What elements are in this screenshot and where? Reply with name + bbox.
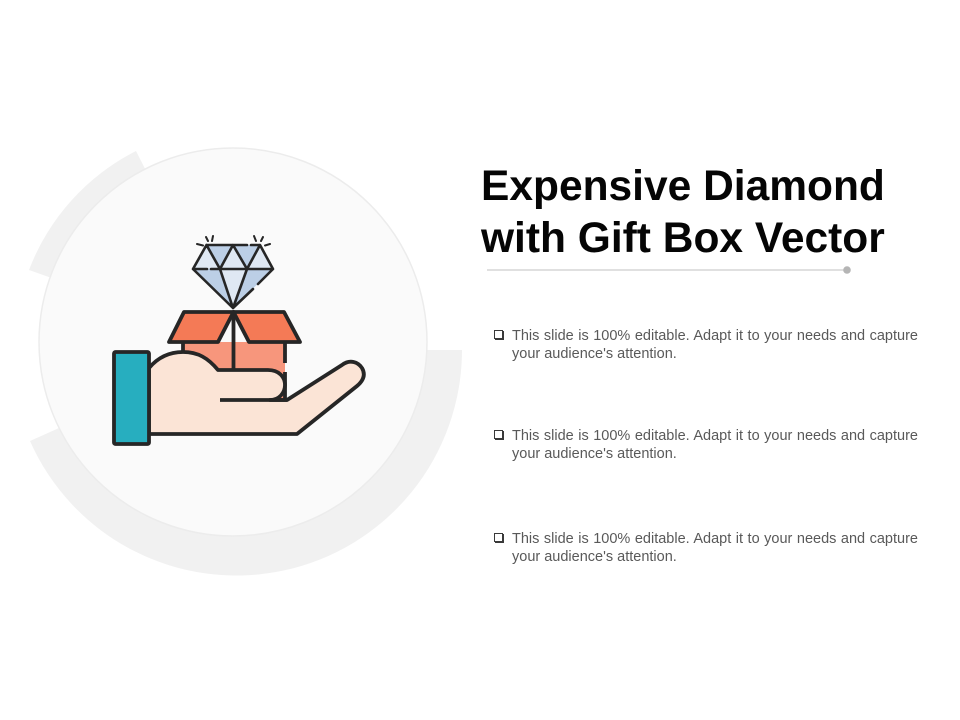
bullet 1: This slide is 100% editable. Adapt it to your needs and capture (512, 328, 918, 344)
bullet 3 (494, 531, 918, 565)
lower ring arc (30, 350, 462, 576)
bullet 3: This slide is 100% editable. Adapt it to your needs and capture (512, 531, 918, 547)
main circle (39, 148, 427, 536)
bullet 1: your audience's attention. (512, 346, 677, 362)
thumb line (220, 398, 287, 402)
upper-left ring arc (29, 151, 233, 342)
icon: gift box (169, 312, 300, 402)
icon: diamond (193, 236, 273, 308)
title divider with dot (487, 266, 851, 274)
icon: teal cuff (114, 352, 149, 444)
bullet 2: This slide is 100% editable. Adapt it to your needs and capture (512, 428, 918, 444)
illustration: circle with hand, gift box and diamond (29, 147, 462, 576)
bullet 1 (494, 328, 918, 362)
icon: hand (149, 352, 364, 434)
title (480, 163, 885, 262)
bullet 2 (494, 428, 918, 462)
title: with Gift Box Vector (481, 215, 885, 262)
title: Expensive Diamond (481, 163, 885, 210)
bullet 3: your audience's attention. (512, 549, 677, 565)
bullet 2: your audience's attention. (512, 446, 677, 462)
